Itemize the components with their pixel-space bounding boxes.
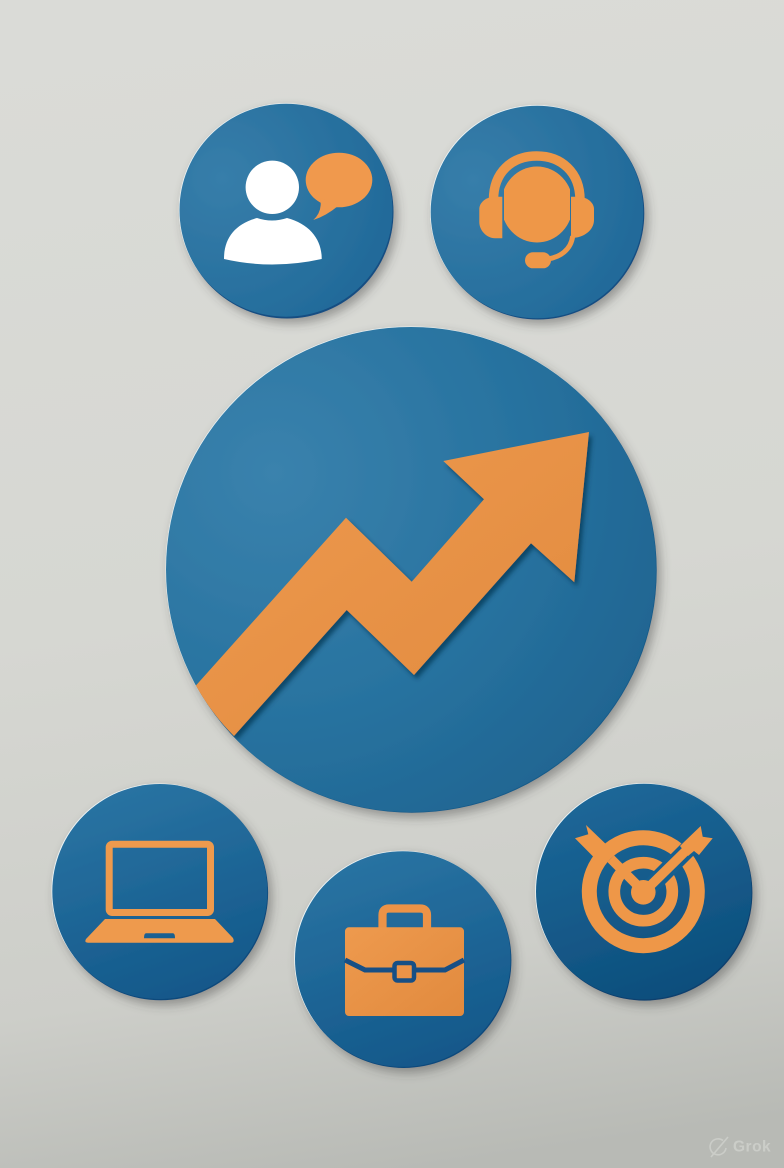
watermark: Grok bbox=[710, 1137, 771, 1157]
disc bbox=[535, 783, 752, 1001]
panel: central growth disc bbox=[166, 326, 657, 813]
left arrow bbox=[575, 825, 636, 884]
speech bubble bbox=[306, 153, 372, 220]
icon: briefcase bbox=[345, 908, 464, 1016]
icon: target with arrows bbox=[575, 825, 713, 946]
laptop base bbox=[85, 919, 234, 943]
strap bbox=[345, 960, 464, 970]
icon: laptop bbox=[85, 844, 234, 943]
icon: headset bbox=[479, 156, 594, 268]
icon: person with speech bubble bbox=[224, 153, 372, 264]
panel: target disc bbox=[535, 783, 752, 1001]
panel: customer support disc bbox=[430, 105, 644, 320]
panel: briefcase disc bbox=[294, 851, 511, 1068]
watermark text: Grok bbox=[733, 1138, 771, 1156]
disc bbox=[294, 851, 511, 1068]
bullseye bbox=[631, 880, 656, 905]
panel: customer conversation disc bbox=[179, 103, 394, 318]
rings bbox=[589, 838, 697, 946]
disc bbox=[166, 326, 657, 813]
panel: laptop disc bbox=[52, 784, 268, 1000]
person bbox=[224, 161, 322, 264]
icon: Grok mark bbox=[710, 1137, 728, 1157]
case body bbox=[345, 927, 464, 1016]
disc bbox=[52, 784, 268, 1000]
disc bbox=[179, 103, 394, 318]
clasp bbox=[394, 963, 414, 980]
right arrow bbox=[650, 826, 713, 886]
arrow gap bbox=[650, 845, 692, 887]
handle bbox=[382, 908, 427, 930]
disc bbox=[430, 105, 644, 320]
arrow: rising growth bbox=[196, 432, 589, 736]
laptop screen bbox=[109, 844, 210, 912]
